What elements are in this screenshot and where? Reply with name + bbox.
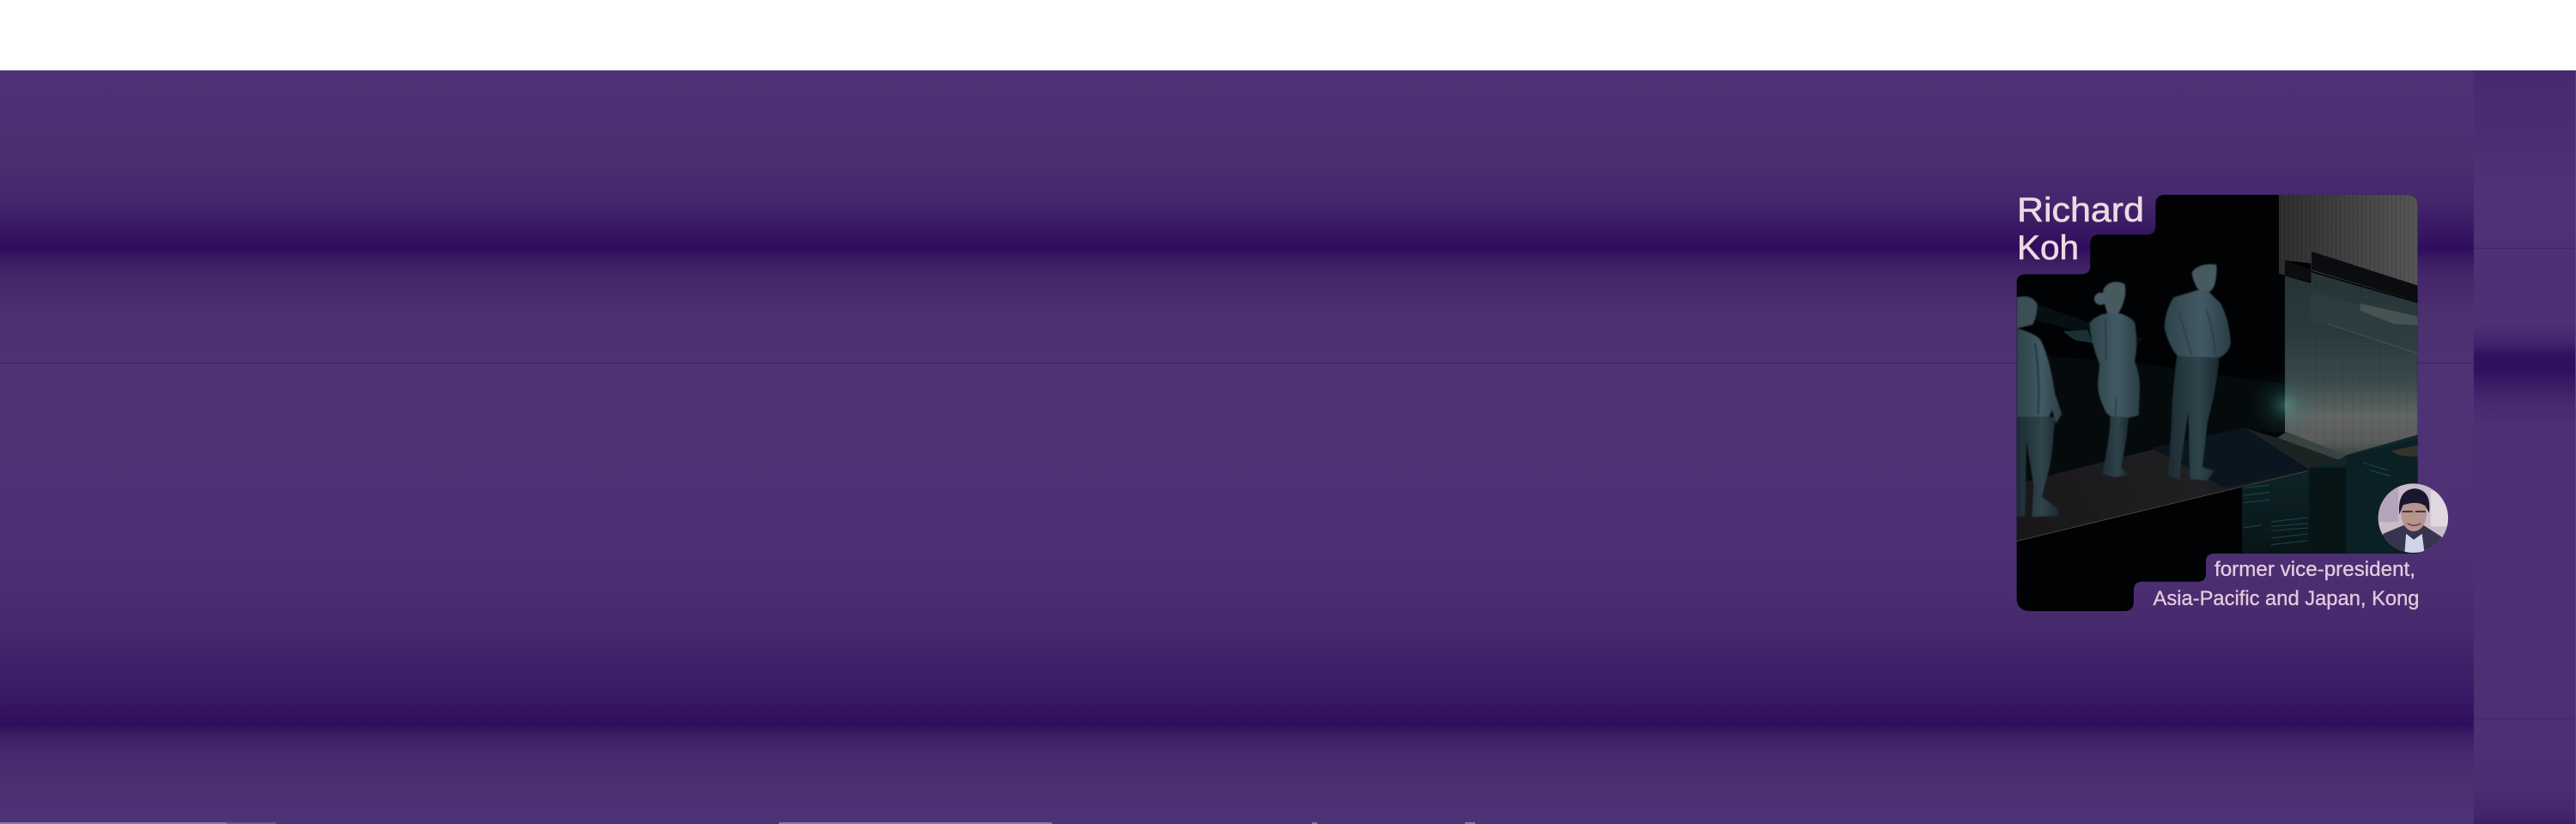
- card illustration: figures and data hall: [2010, 190, 2425, 618]
- figure: woman: [2090, 282, 2140, 477]
- job title caption: Asia-Pacific and Japan, Kong: [2154, 587, 2420, 610]
- page white top strip: [0, 0, 2576, 70]
- figure: left man: [2017, 296, 2062, 518]
- avatar: portrait photo of Richard Koh: [2377, 483, 2449, 553]
- background panel: right banded column: [2474, 70, 2576, 824]
- name heading: Koh: [2017, 229, 2079, 267]
- name heading: [2017, 191, 2144, 267]
- job title caption: [2154, 558, 2420, 610]
- job title caption: former vice-president,: [2215, 558, 2415, 581]
- name heading: Richard: [2017, 191, 2144, 229]
- profile card: [2010, 190, 2449, 618]
- figure: standing man: [2165, 264, 2231, 481]
